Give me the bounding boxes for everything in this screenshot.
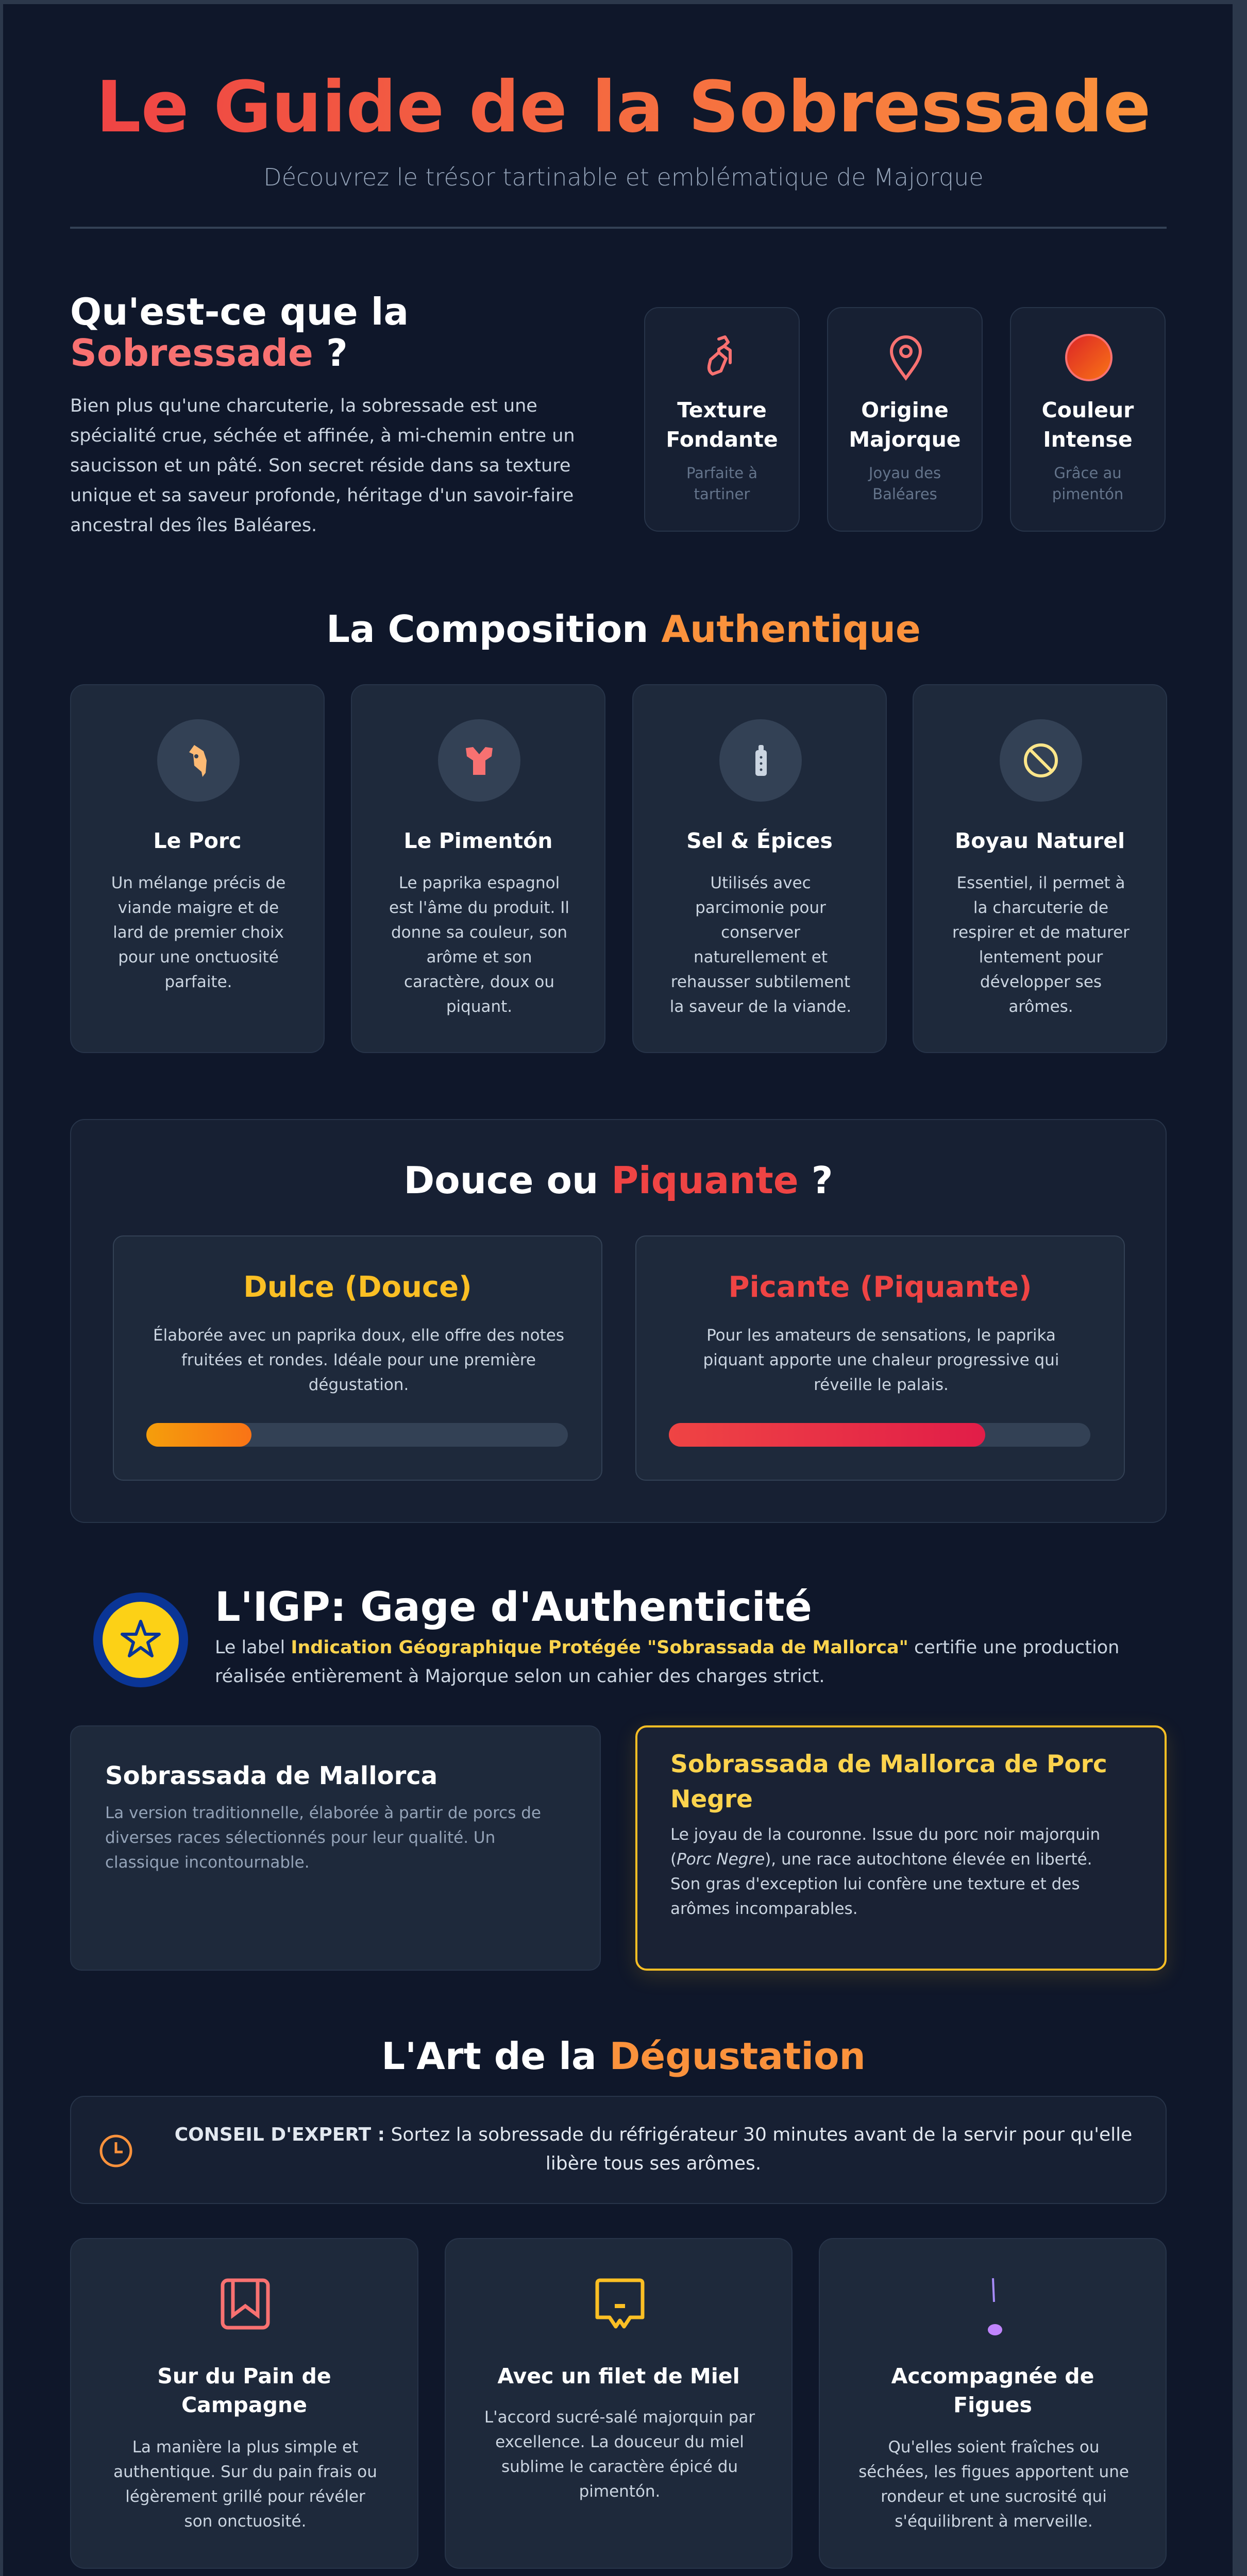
IGP heading and text: Le label Indication Géographique Protégée "Sobrassada de Mallorca" certifie une production réalisée entièrement à Majorque selon un cahier des charges strict. <box>215 1637 1119 1687</box>
icon: fig <box>988 2278 1002 2335</box>
text: L'accord sucré-salé majorquin par excellence. La douceur du miel sublime le caractère épicé du pimentón. <box>484 2408 755 2501</box>
heading: Qu'est-ce que la <box>70 290 409 333</box>
icon: clock <box>100 2135 132 2167</box>
card title: Le Pimentón <box>404 828 552 853</box>
title: Accompagnée de <box>891 2364 1094 2388</box>
panel: douce ou piquante <box>70 1119 1167 1523</box>
bar: low heat <box>146 1423 568 1447</box>
heading: Sobressade ? <box>70 331 348 375</box>
icon: honey tag <box>596 2278 644 2329</box>
card title: Couleur <box>1042 398 1134 422</box>
card title: Majorque <box>849 427 961 452</box>
card: boyau <box>913 684 1167 1053</box>
title: Sobrassada de Mallorca de Porc Negre <box>670 1750 1107 1814</box>
section: what is it <box>70 290 575 536</box>
card text: Baléares <box>872 485 937 503</box>
card: sel <box>632 684 887 1053</box>
title: Le Guide de la Sobressade <box>96 66 1151 148</box>
icon: hand <box>707 335 732 376</box>
callout: expert tip <box>70 2096 1167 2204</box>
bar: high heat <box>669 1423 1090 1447</box>
title: Sur du Pain de <box>157 2364 331 2388</box>
title: Avec un filet de Miel <box>497 2364 740 2388</box>
card title: Origine <box>861 398 949 422</box>
heading <box>70 290 409 375</box>
card: figues <box>819 2238 1167 2569</box>
IGP heading and text <box>215 1584 1119 1687</box>
icon: pin <box>890 335 922 381</box>
title <box>891 2364 1094 2417</box>
icon: pig <box>157 719 240 802</box>
card: origine <box>827 307 983 532</box>
icon: bookmark <box>221 2278 270 2330</box>
text: Élaborée avec un paprika doux, elle offre des notes fruitées et rondes. Idéale pour une première dégustation. <box>153 1326 564 1394</box>
paragraph: Bien plus qu'une charcuterie, la sobressade est une spécialité crue, séchée et affinée, à mi-chemin entre un saucisson et un pâté. Son secret réside dans sa texture unique et sa saveur profonde, héritage d'un savoir-faire ancestral des îles Baléares. <box>70 396 575 536</box>
title: Campagne <box>181 2393 307 2417</box>
icon: pepper <box>438 719 520 802</box>
card: pimenton <box>351 684 605 1053</box>
title <box>157 2364 331 2417</box>
card text: Parfaite à <box>686 464 757 482</box>
tip text: CONSEIL D'EXPERT : Sortez la sobressade du réfrigérateur 30 minutes avant de la servir pour qu'elle libère tous ses arômes. <box>175 2124 1132 2174</box>
card text <box>686 464 757 503</box>
card text: Essentiel, il permet à la charcuterie de respirer et de maturer lentement pour développer ses arômes. <box>952 874 1130 1016</box>
card: Porc Negre <box>635 1725 1167 1971</box>
subtitle: Dulce (Douce) <box>243 1270 472 1304</box>
heading: degustation: L'Art de la Dégustation <box>381 2035 866 2078</box>
subtitle: Picante (Piquante) <box>728 1270 1032 1304</box>
title: Figues <box>953 2393 1032 2417</box>
card title <box>849 398 961 452</box>
card: miel <box>445 2238 793 2569</box>
card title: Le Porc <box>154 828 241 853</box>
title: Sobrassada de Mallorca <box>105 1761 437 1790</box>
heading: composition: La Composition Authentique <box>326 607 921 651</box>
card: Sobrassada de Mallorca <box>70 1725 601 1971</box>
sub-card: dulce <box>113 1235 602 1481</box>
card: couleur <box>1010 307 1166 532</box>
card text <box>868 464 941 503</box>
icon: circle slash <box>1000 719 1082 802</box>
text: Qu'elles soient fraîches ou séchées, les figues apportent une rondeur et une sucrosité qui s'équilibrent à merveille. <box>858 2438 1129 2531</box>
card text: Grâce au <box>1054 464 1122 482</box>
card title: Intense <box>1043 427 1133 452</box>
card text: Joyau des <box>869 464 941 482</box>
card title: Fondante <box>666 427 778 452</box>
card title <box>666 398 778 452</box>
subtitle: Découvrez le trésor tartinable et emblématique de Majorque <box>263 163 984 191</box>
card text: Utilisés avec parcimonie pour conserver naturellement et rehausser subtilement la saveur de la viande. <box>670 874 851 1016</box>
card title <box>1042 398 1134 452</box>
text: La manière la plus simple et authentique. Sur du pain frais ou légèrement grillé pour révéler son onctuosité. <box>113 2438 377 2531</box>
icon: IGP badge <box>93 1592 188 1687</box>
text: La version traditionnelle, élaborée à partir de porcs de diverses races sélectionnés pour leur qualité. Un classique incontournable. <box>105 1804 541 1872</box>
card title: Texture <box>677 398 767 422</box>
card: pain <box>70 2238 418 2569</box>
card title: Sel & Épices <box>686 828 833 853</box>
card title: Boyau Naturel <box>955 828 1125 853</box>
icon: color dot <box>1065 334 1113 381</box>
card text: Le paprika espagnol est l'âme du produit. Il donne sa couleur, son arôme et son caractère, doux ou piquant. <box>389 874 569 1016</box>
card: texture <box>644 307 800 532</box>
text: Le joyau de la couronne. Issue du porc noir majorquin (Porc Negre), une race autochtone élevée en liberté. Son gras d'exception lui confère une texture et des arômes incomparables. <box>670 1825 1100 1918</box>
sub-card: picante <box>635 1235 1125 1481</box>
icon: salt shaker <box>719 719 802 802</box>
heading: Douce ou Piquante ? <box>403 1159 833 1202</box>
text: Pour les amateurs de sensations, le paprika piquant apporte une chaleur progressive qui réveille le palais. <box>703 1326 1059 1394</box>
card: porc <box>70 684 325 1053</box>
card text: pimentón <box>1052 485 1123 503</box>
IGP heading and text: L'IGP: Gage d'Authenticité <box>215 1584 812 1631</box>
card text <box>1052 464 1123 503</box>
card text: Un mélange précis de viande maigre et de lard de premier choix pour une onctuosité parfaite. <box>111 874 285 991</box>
card text: tartiner <box>694 485 750 503</box>
